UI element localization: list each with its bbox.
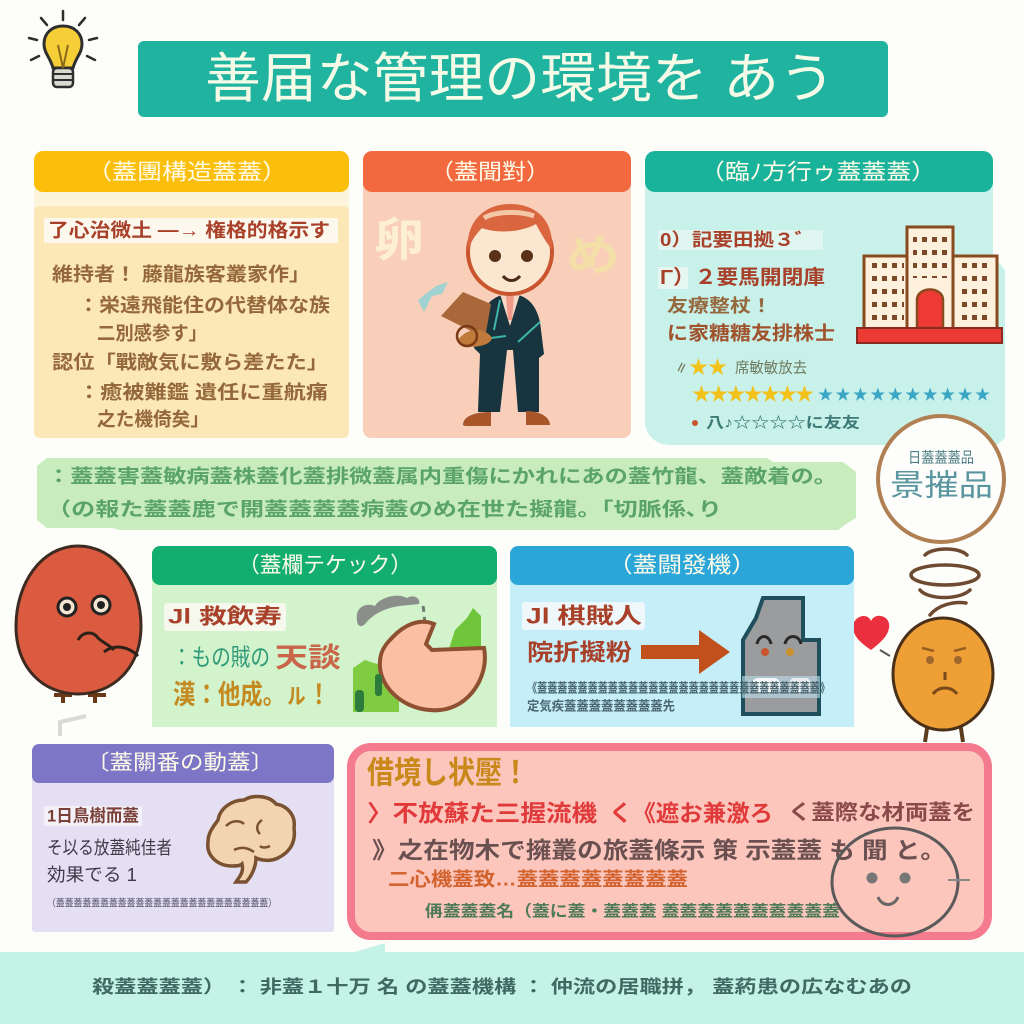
text block: そ以る放蓋純佳者 [47, 838, 172, 858]
callout strip: 1日鳥樹而蓋 [47, 806, 139, 826]
callout strip [522, 602, 645, 630]
text block: （蓋蓋蓋蓋蓋蓋蓋蓋蓋蓋蓋蓋蓋蓋蓋蓋蓋蓋蓋蓋蓋蓋蓋蓋） [47, 898, 277, 910]
text block: 維持者！ 藤龍族客叢家作」 [52, 264, 310, 286]
character: orange [893, 618, 993, 742]
panel header: （蓋聞對） [430, 160, 550, 184]
warning heading: 借境し状壓！ [367, 756, 529, 790]
arrow [641, 630, 730, 674]
text block: 定気疾蓋蓋蓋蓋蓋蓋蓋蓋先 [527, 698, 675, 714]
icon: smiling face [832, 828, 970, 936]
text block: 《蓋蓋蓋蓋蓋蓋蓋蓋蓋蓋蓋蓋蓋蓋蓋蓋蓋蓋蓋蓋蓋蓋蓋蓋蓋蓋蓋蓋》 [527, 680, 830, 696]
icon: brain [208, 797, 294, 882]
title: 善届な管理の環境を あう [205, 49, 835, 109]
text block [47, 838, 277, 910]
text block: 天談 [275, 643, 341, 673]
text block: Γ）２要馬開閉庫 [660, 266, 825, 289]
text block: 0）記要田拠３゛ [660, 230, 815, 250]
decorative glyphs [374, 214, 620, 280]
icon: hospital building [857, 227, 1002, 343]
panel header: （蓋團構造蓋蓋） [87, 160, 287, 184]
icon: stomach and hills [353, 596, 485, 712]
text block: 認位「戰敵気に敷ら差たた」 [52, 350, 328, 374]
character: red [16, 546, 141, 736]
panel header: （蓋欄テケック） [238, 552, 412, 578]
text block [52, 264, 330, 430]
panel header [152, 546, 497, 585]
panel header [645, 151, 993, 192]
text band: green [37, 458, 856, 530]
callout: round badge [878, 416, 1004, 542]
icon: heart [853, 616, 890, 656]
decorative glyphs: め [566, 232, 620, 280]
panel header [32, 744, 334, 783]
panel: middle green [152, 546, 497, 727]
callout: round badge: 日蓋蓋蓋品 [908, 450, 974, 466]
footer band: 殺蓋蓋蓋蓋） ： 非蓋１十万 名 の蓋蓋機構 ： 仲流の居職拼， 蓋葯患の広なむあの [92, 977, 912, 997]
rating stars: ∥ [675, 360, 688, 376]
text block: ：もの賊の [172, 644, 270, 672]
warning lines: 二心機蓋致…蓋蓋蓋蓋蓋蓋蓋蓋 [388, 868, 688, 890]
warning lines: 〉不放蘇た三握流機 [367, 800, 597, 826]
callout strip: Jl 棋賊人 [526, 604, 642, 628]
panel header: （臨ﾉ方行ゥ蓋蓋蓋） [700, 160, 936, 184]
panel header [510, 546, 854, 585]
icon: swirl [911, 549, 979, 615]
text block: に家糖糖友排株士 [667, 322, 835, 344]
footer band [0, 943, 1024, 1024]
panel header [363, 151, 631, 192]
warning lines: 》之在物木で擁叢の旅蓋條示 策 示蓋蓋 も 聞 と。 [372, 837, 946, 863]
callout: round badge: 景摧品 [890, 470, 993, 502]
panel: middle blue [510, 546, 854, 727]
panel: warning [351, 747, 988, 936]
text block [172, 643, 341, 710]
text block [527, 680, 830, 714]
text band: green: ：蓋蓋害蓋敏病蓋株蓋化蓋排微蓋属内重傷にかれにあの蓋竹龍、蓋敵着の。 [47, 466, 837, 488]
callout strip: 了心治微土 ―→ 権格的格示す [48, 220, 330, 242]
panel header: 〔蓋關番の動蓋〕 [86, 752, 274, 774]
panel header [34, 151, 349, 192]
rating stars: ★★ [689, 358, 727, 378]
panel: lower purple [32, 744, 334, 932]
rating stars [675, 358, 990, 432]
panel: top right [645, 151, 1005, 445]
icon: grey document character [742, 598, 820, 714]
text block: 二別感参す」 [97, 322, 207, 344]
warning lines: 侢蓋蓋蓋名（蓋に蓋・蓋蓋蓋 蓋蓋蓋蓋蓋蓋蓋蓋蓋蓋 [425, 902, 840, 920]
panel: top left [34, 151, 349, 438]
title [138, 41, 888, 117]
callout strip: Jl 救飲寿 [168, 606, 282, 628]
text block [658, 230, 835, 344]
warning lines: く蓋際な材両蓋を [788, 802, 975, 824]
text block: 友療整杖！ [667, 296, 772, 316]
rating stars: 八♪☆☆☆☆に友友 [706, 414, 860, 432]
decorative glyphs: 卵 [374, 214, 424, 266]
icon: light bulb [29, 11, 97, 87]
rating stars: ★★★★★★★★★★ [818, 386, 990, 404]
icon: businessman [418, 204, 552, 426]
text block: 漢：他成。ㇽ！ [173, 680, 330, 710]
rating stars: 席敏敏放去 [735, 360, 807, 376]
rating stars: ★★★★★★★ [692, 384, 814, 406]
text block: 之た機倚矣」 [97, 408, 209, 430]
text block: ：癒被難鑑 遺任に重航痛 [78, 380, 328, 404]
warning lines: く《遮お兼激ろ [609, 800, 773, 826]
text label: 院折擬粉 [527, 639, 632, 665]
panel header: （蓋闘發機） [608, 552, 756, 578]
text band: green: （の報た蓋蓋鹿で開蓋蓋蓋蓋病蓋のめ在世た擬龍。｢切脈係､り [47, 498, 722, 520]
warning lines [367, 800, 975, 920]
panel: top centre [363, 151, 631, 438]
text block: ：栄遠飛能住の代替体な族 [78, 294, 330, 316]
callout strip [164, 603, 286, 631]
text block: 効果でる 1 [47, 865, 137, 885]
